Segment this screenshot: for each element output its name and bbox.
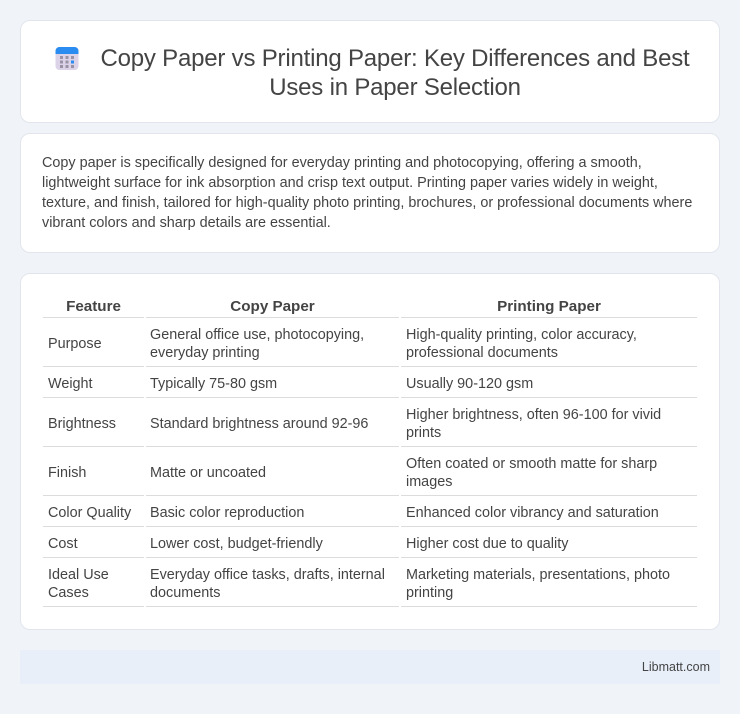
ideal use printing bbox=[406, 567, 670, 601]
panel: table card bbox=[20, 273, 720, 630]
panel: title card bbox=[20, 20, 720, 123]
comparison table bbox=[43, 298, 697, 607]
color quality printing: Enhanced color vibrancy and saturation bbox=[406, 505, 659, 521]
header: copy paper: Copy Paper bbox=[230, 298, 315, 315]
purpose printing: professional documents bbox=[406, 345, 558, 361]
ideal use copy: Everyday office tasks, drafts, internal bbox=[150, 567, 385, 583]
row: color quality: Color Quality bbox=[48, 505, 131, 521]
header: feature: Feature bbox=[66, 298, 121, 315]
row: cost: Cost bbox=[48, 536, 78, 552]
weight printing: Usually 90-120 gsm bbox=[406, 376, 533, 392]
intro text: Copy paper is specifically designed for everyday printing and photocopying, offering a smooth, bbox=[42, 155, 642, 171]
finish printing bbox=[406, 456, 657, 490]
ideal use printing: Marketing materials, presentations, photo bbox=[406, 567, 670, 583]
row: ideal use cases: Ideal Use bbox=[48, 567, 109, 583]
color quality copy: Basic color reproduction bbox=[150, 505, 304, 521]
purpose copy: everyday printing bbox=[150, 345, 260, 361]
intro text: lightweight surface for ink absorption and crisp text output. Printing paper varies widely in weight, bbox=[42, 175, 658, 191]
row: finish: Finish bbox=[48, 465, 86, 481]
finish printing: images bbox=[406, 474, 452, 490]
ideal use printing: printing bbox=[406, 585, 453, 601]
finish printing: Often coated or smooth matte for sharp bbox=[406, 456, 657, 472]
ideal use copy bbox=[150, 567, 385, 601]
purpose copy bbox=[150, 327, 364, 361]
header: printing paper: Printing Paper bbox=[497, 298, 601, 315]
title: Uses in Paper Selection bbox=[269, 74, 521, 101]
ideal use copy: documents bbox=[150, 585, 220, 601]
brightness printing: Higher brightness, often 96-100 for vivid bbox=[406, 407, 661, 423]
title: Copy Paper vs Printing Paper: Key Differences and Best bbox=[100, 45, 690, 72]
row: ideal use cases bbox=[48, 567, 109, 601]
purpose printing bbox=[406, 327, 637, 361]
title bbox=[100, 45, 690, 101]
cost copy: Lower cost, budget-friendly bbox=[150, 536, 323, 552]
weight copy: Typically 75-80 gsm bbox=[150, 376, 277, 392]
brightness printing: prints bbox=[406, 425, 441, 441]
row: brightness: Brightness bbox=[48, 416, 116, 432]
row: purpose: Purpose bbox=[48, 336, 102, 352]
intro text: vibrant colors and sharp details are essential. bbox=[42, 215, 331, 231]
panel: intro card bbox=[20, 133, 720, 253]
icon: calendar bbox=[56, 47, 78, 70]
finish copy: Matte or uncoated bbox=[150, 465, 266, 481]
brightness copy: Standard brightness around 92-96 bbox=[150, 416, 368, 432]
row: ideal use cases: Cases bbox=[48, 585, 89, 601]
cost printing: Higher cost due to quality bbox=[406, 536, 568, 552]
footer bar bbox=[20, 650, 720, 684]
intro text: texture, and finish, tailored for high-quality photo printing, brochures, or professional documents where bbox=[42, 195, 692, 211]
brightness printing bbox=[406, 407, 661, 441]
row: weight: Weight bbox=[48, 376, 93, 392]
purpose printing: High-quality printing, color accuracy, bbox=[406, 327, 637, 343]
intro text bbox=[42, 155, 692, 231]
footer text: Libmatt.com bbox=[642, 660, 710, 674]
purpose copy: General office use, photocopying, bbox=[150, 327, 364, 343]
